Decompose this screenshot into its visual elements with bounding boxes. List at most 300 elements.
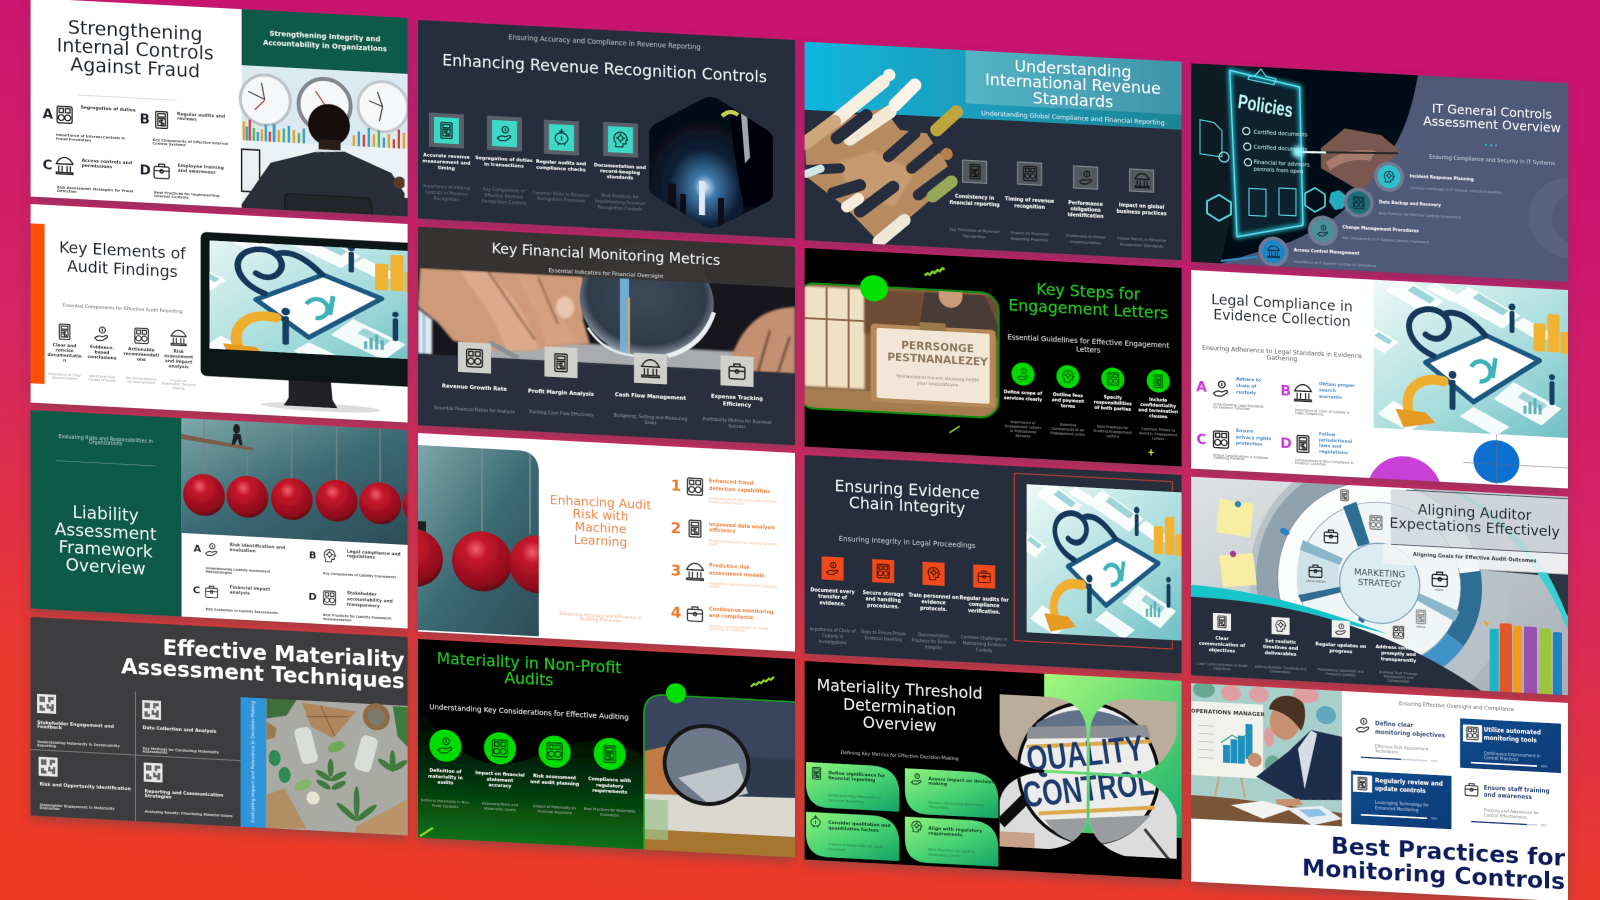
numbered list: detection capabilities bbox=[709, 486, 770, 495]
green wave bbox=[418, 707, 658, 850]
subtitle: Defining Key Metrics for Effective Decision-Making bbox=[841, 750, 959, 762]
items A-D: jurisdictional bbox=[1318, 437, 1353, 444]
labels: promptly and bbox=[1381, 650, 1416, 658]
labels bbox=[37, 719, 223, 803]
slide: Key Financial Monitoring Metrics bbox=[418, 227, 795, 446]
descriptions: Analyzing Results: Prioritizing Material Issues bbox=[145, 810, 233, 818]
card: staff training bbox=[1465, 783, 1550, 828]
numbered list: Learning Techniques bbox=[709, 500, 744, 506]
list items: Best Practices for Effective Controls Assessment bbox=[1379, 211, 1462, 220]
green cards: Financial Reporting bbox=[828, 798, 864, 804]
labels bbox=[810, 587, 1009, 616]
descriptions: Importance of bbox=[1010, 420, 1036, 425]
icons bbox=[1213, 613, 1408, 641]
labels: Impact on global bbox=[1119, 202, 1165, 210]
items A-D: reviews bbox=[177, 115, 197, 122]
descriptions: Key Principles of Revenue bbox=[950, 226, 1000, 234]
numbered list: assessment models bbox=[709, 570, 764, 579]
items A-D: Access controls and bbox=[82, 157, 132, 166]
descriptions: Custody in bbox=[822, 632, 844, 638]
card: automated tools: 80% bbox=[1541, 764, 1548, 768]
descriptions: Profit Contexts bbox=[432, 804, 459, 809]
labels: Train personnel on bbox=[908, 592, 959, 601]
descriptions: Essential Financial Ratios for Analysis bbox=[434, 405, 515, 415]
descriptions: Common Pitfalls to bbox=[1141, 427, 1175, 433]
descriptions: Defining Materiality in Non- bbox=[421, 798, 471, 805]
green cards: financial reporting bbox=[828, 775, 875, 783]
items A-D: Gathering Practices bbox=[1213, 456, 1245, 461]
items A-D: Internal Controls bbox=[154, 194, 188, 200]
numbered list bbox=[671, 476, 778, 635]
heading: Overview bbox=[863, 712, 937, 735]
items A-D: Regular audits and bbox=[177, 111, 225, 119]
labels: Reporting and Communication bbox=[145, 788, 223, 798]
title panel: Standards bbox=[1033, 88, 1113, 111]
heading: Risk with bbox=[573, 505, 628, 523]
subtitle: Ensuring Adherence to Legal Standards in Evidence bbox=[1202, 344, 1362, 360]
items A-D: Best Practices for Liability Framework bbox=[323, 613, 392, 621]
descriptions bbox=[37, 740, 233, 820]
items A-D: Detection bbox=[57, 189, 77, 194]
items A-D: Follow bbox=[1319, 431, 1335, 438]
descriptions: Evaluation bbox=[600, 813, 619, 818]
descriptions: Impact on bbox=[170, 378, 187, 383]
labels: Cash Flow Management bbox=[615, 392, 686, 402]
items A-D: Importance of Internal Controls in bbox=[56, 133, 126, 141]
subtitle: Ensuring Accuracy and Compliance in Revenue Reporting bbox=[509, 33, 701, 51]
dark corner and teal swoosh bbox=[1453, 492, 1568, 631]
descriptions: Integrity bbox=[925, 644, 943, 650]
heading: Evidence Collection bbox=[1213, 307, 1351, 330]
numbered list: Audits bbox=[709, 584, 720, 589]
list items: Access Control Management bbox=[1294, 247, 1359, 256]
numbered list: Continuous monitoring bbox=[709, 606, 774, 616]
squiggles bbox=[420, 658, 774, 855]
labels: evidence bbox=[921, 599, 946, 606]
items A-D: A bbox=[43, 106, 54, 123]
labels: terms bbox=[1061, 402, 1075, 409]
neon policies photo: pennals from open bbox=[1254, 167, 1303, 175]
labels: of both parties bbox=[1094, 404, 1132, 412]
descriptions: Assessing Risks and bbox=[482, 801, 518, 807]
neon policies photo: Certified documents bbox=[1254, 130, 1308, 138]
descriptions: Profitability Metrics for Business bbox=[703, 416, 772, 425]
slide: Ensuring Evidence Chain Integrity bbox=[805, 455, 1182, 674]
descriptions: Reporting Practices bbox=[1011, 235, 1048, 242]
labels: Efficiency bbox=[723, 401, 752, 409]
labels: materiality in bbox=[428, 773, 463, 781]
slide: Aligning Auditor Expectations Effectively bbox=[1191, 443, 1568, 723]
items A-D: Consequences of Non-Compliance in bbox=[1295, 458, 1353, 465]
items A-D: Employee training bbox=[178, 162, 224, 171]
blue vertical strip bbox=[241, 697, 266, 828]
numbered list: 3 bbox=[671, 561, 681, 580]
step labels: Documentation and bbox=[594, 162, 646, 171]
items A-D: transparency bbox=[347, 601, 380, 609]
subtitle: Ensuring Integrity in Legal Proceedings bbox=[839, 535, 976, 550]
card: review controls: Regularly review and bbox=[1375, 778, 1443, 788]
card: automated tools: Continuous Improvement in bbox=[1484, 750, 1541, 758]
step descriptions: Recognition bbox=[434, 195, 459, 203]
card: review controls: update controls bbox=[1375, 786, 1426, 795]
labels: Define scope of bbox=[1004, 389, 1042, 397]
green circle icons bbox=[1012, 362, 1170, 394]
neon policies photo: Financial for advisors bbox=[1254, 160, 1310, 169]
icons bbox=[963, 159, 1154, 192]
items A-D: Stakeholder bbox=[347, 590, 378, 597]
title boxes: Aligning Goals for Effective Audit Outcomes bbox=[1413, 552, 1536, 565]
labels: concise bbox=[55, 347, 74, 354]
slide: Liability Assessment Framework Overview bbox=[31, 410, 445, 630]
items A-D: Methodologies bbox=[206, 570, 232, 575]
card: automated tools: Control Practices bbox=[1484, 755, 1518, 761]
green circle icons bbox=[429, 728, 626, 772]
card: define objectives: Techniques bbox=[1374, 748, 1398, 754]
list items: Data Backup and Recovery bbox=[1379, 199, 1441, 208]
labels bbox=[428, 767, 631, 795]
card: automated tools: monitoring tools bbox=[1484, 736, 1537, 745]
header band bbox=[242, 9, 408, 74]
labels: and payment bbox=[1052, 397, 1084, 404]
labels: and termination bbox=[1138, 407, 1178, 415]
labels: progress bbox=[1329, 648, 1352, 655]
labels: transfer of bbox=[818, 593, 848, 601]
subtitle: Ensuring Compliance and Security in IT Systems bbox=[1429, 154, 1555, 167]
list items: Change Management Procedures bbox=[1342, 224, 1419, 233]
green cards: Impact of Materiality on Audit bbox=[828, 842, 884, 849]
green cards: Understanding Materiality in bbox=[828, 793, 881, 800]
labels: obligations bbox=[1071, 206, 1101, 214]
descriptions: Engagement Letter bbox=[1051, 431, 1086, 437]
items A-D: Ensure bbox=[1236, 427, 1253, 434]
labels: Address concerns bbox=[1376, 644, 1422, 652]
items A-D: Implementation bbox=[323, 617, 352, 622]
labels: procedures. bbox=[867, 602, 900, 610]
neon policies photo: Certified documents bbox=[1254, 145, 1308, 153]
card: staff training: Ensure staff training bbox=[1484, 785, 1550, 795]
labels bbox=[949, 194, 1167, 218]
items A-D: Understanding Liability Assessment bbox=[206, 566, 271, 574]
step labels: Regular audits and bbox=[536, 158, 586, 167]
labels: compliance bbox=[969, 601, 1000, 609]
numbered list: Integrating Risk Assessment in Financial bbox=[709, 581, 777, 589]
red frame with illustration bbox=[1011, 473, 1182, 650]
items A-D: analysis bbox=[230, 589, 250, 596]
step descriptions: Implementing Revenue bbox=[595, 198, 645, 207]
items A-D: Evidence Collection bbox=[1295, 461, 1326, 467]
subtitle: Enhancing Accuracy and Efficiency in bbox=[559, 610, 642, 621]
slide: Enhancing Audit Risk with Machine Learning bbox=[385, 431, 795, 653]
items A-D: Control Systems bbox=[153, 141, 186, 147]
labels: Actionable bbox=[128, 346, 154, 353]
neon policies photo bbox=[1191, 63, 1418, 274]
slide: Strengthening Internal Controls Against Fraud bbox=[31, 0, 409, 217]
labels: based bbox=[95, 349, 109, 356]
teal icons bbox=[429, 113, 638, 159]
labels: financial reporting bbox=[950, 199, 1000, 208]
QR icons bbox=[37, 694, 163, 782]
items A-D: chain of bbox=[1236, 382, 1256, 389]
neon policies photo: Policies bbox=[1237, 91, 1294, 122]
step labels: standards bbox=[607, 174, 633, 181]
step labels: record-keeping bbox=[600, 168, 640, 176]
photo: parcels and plants bbox=[266, 698, 409, 836]
items A-D: for Evidence Collection bbox=[1213, 405, 1250, 411]
title boxes bbox=[1383, 489, 1568, 574]
labels: Revenue Growth Rate bbox=[442, 384, 507, 393]
descriptions: Drafting Engagement bbox=[1093, 429, 1133, 435]
subtitle: Essential Guidelines for Effective Engagement bbox=[1007, 333, 1169, 350]
green panel: Overview bbox=[66, 555, 146, 579]
items A-D: Segregation of duties bbox=[81, 104, 136, 113]
green panel: Organizations bbox=[89, 439, 123, 447]
title panel bbox=[966, 50, 1182, 115]
descriptions: Recommendations bbox=[126, 376, 157, 382]
books bbox=[1483, 620, 1562, 702]
marketing wheel: MARKETING bbox=[1354, 568, 1405, 581]
heading: Legal Compliance in bbox=[1211, 292, 1353, 316]
items A-D: Key Components of Liability Frameworks bbox=[323, 571, 397, 579]
labels: Regular updates on bbox=[1315, 641, 1366, 649]
marketing wheel: SOCIA MEDIA bbox=[1306, 579, 1327, 584]
dark lower wave bbox=[1191, 585, 1481, 691]
step descriptions: Common Risks in Revenue bbox=[532, 190, 590, 199]
descriptions: Transparency and bbox=[1382, 675, 1414, 680]
labels: Risk and Opportunity Identification bbox=[40, 781, 131, 792]
green cards: Materiality Levels bbox=[928, 853, 961, 858]
labels: Data Collection and Analysis bbox=[143, 725, 217, 735]
labels: recommendati bbox=[123, 350, 160, 358]
labels: analysis bbox=[169, 363, 189, 370]
heading: Chain Integrity bbox=[849, 492, 965, 518]
heading: Best Practices for bbox=[1331, 831, 1565, 872]
slide: Materiality in Non-Profit Audits bbox=[418, 639, 795, 859]
descriptions: Causes of Issues bbox=[88, 378, 116, 383]
descriptions: Making bbox=[173, 386, 185, 391]
labels: timelines and bbox=[1263, 644, 1298, 652]
descriptions: Documentation bbox=[52, 376, 77, 381]
photo: red pendulum balls bbox=[182, 418, 445, 547]
slide: IT General Controls Assessment Overview bbox=[1191, 63, 1568, 282]
card: define objectives: monitoring objectives bbox=[1375, 730, 1446, 739]
card: review controls bbox=[1351, 770, 1452, 829]
step labels bbox=[422, 152, 646, 182]
labels: Risk assessment bbox=[533, 773, 577, 781]
photo: operations manager: OPERATIONS MANAGER bbox=[1191, 709, 1265, 719]
labels: Clear bbox=[1215, 635, 1229, 642]
items A-D: laws and bbox=[1319, 442, 1341, 449]
items A-D: Legal Compliance bbox=[1295, 411, 1323, 417]
step labels: compliance checks bbox=[536, 164, 586, 173]
labels: Definition of bbox=[429, 767, 462, 775]
items A-D: regulations bbox=[1319, 448, 1348, 456]
heading: Engagement Letters bbox=[1008, 295, 1168, 322]
items A-D: B bbox=[140, 111, 150, 128]
descriptions: in Professional bbox=[1010, 429, 1036, 434]
green cards: quantitative factors bbox=[828, 825, 879, 833]
descriptions: Stakeholder Engagement in Materiality bbox=[40, 803, 115, 811]
descriptions: Future Trends in Revenue bbox=[1117, 235, 1167, 242]
numbered list: Predictive risk bbox=[709, 563, 750, 571]
green cards: Align with regulatory bbox=[928, 825, 982, 834]
descriptions: Engagement Letters bbox=[1005, 424, 1041, 430]
descriptions: Essential bbox=[1060, 423, 1076, 427]
descriptions: Stakeholder Decision bbox=[161, 382, 196, 387]
descriptions: Frequent Updates bbox=[1326, 672, 1356, 677]
descriptions: Practices for Evidence bbox=[911, 637, 956, 644]
green cards: Thresholds bbox=[927, 805, 948, 810]
items A-D: custody bbox=[1236, 389, 1256, 396]
descriptions: Clear Communication of Audit bbox=[1197, 662, 1248, 668]
descriptions: Success bbox=[728, 423, 746, 430]
labels: services clearly bbox=[1004, 394, 1042, 402]
items A-D: A bbox=[1196, 379, 1207, 396]
descriptions: Collaboration bbox=[1387, 679, 1410, 684]
green cards: Best Practices for Setting bbox=[928, 848, 975, 854]
descriptions: Setting Realistic Timelines and bbox=[1255, 664, 1307, 671]
descriptions: Best Practices for bbox=[1097, 425, 1129, 430]
green panel: Framework bbox=[59, 537, 153, 562]
items A-D: accountability and bbox=[347, 596, 393, 604]
header band: Accountability in Organizations bbox=[263, 39, 387, 53]
heading: Effective Materiality bbox=[163, 635, 405, 673]
descriptions: for Improvement bbox=[127, 380, 156, 385]
descriptions: Custody bbox=[976, 647, 993, 652]
items A-D bbox=[1196, 374, 1355, 468]
descriptions: Evaluation bbox=[40, 806, 60, 811]
labels: protocols. bbox=[920, 605, 947, 613]
descriptions: Importance of Clear bbox=[48, 372, 82, 378]
heading: Against Fraud bbox=[70, 54, 200, 82]
heading: Internal Controls bbox=[57, 34, 214, 65]
card: staff training: 85% bbox=[1541, 823, 1548, 827]
labels: transparently bbox=[1381, 656, 1416, 664]
numbered list: Enhanced fraud bbox=[709, 478, 754, 487]
descriptions: Impact of Materiality on bbox=[533, 804, 576, 810]
items A-D bbox=[193, 540, 401, 625]
step labels: Accurate revenue bbox=[423, 152, 470, 160]
labels: n bbox=[63, 358, 66, 363]
descriptions: Services bbox=[1015, 434, 1031, 438]
items A-D: Adhere to bbox=[1236, 376, 1261, 383]
photo: operations manager bbox=[1191, 681, 1342, 827]
numbered list: 1 bbox=[671, 476, 681, 495]
items A-D: B bbox=[1280, 383, 1291, 400]
icons bbox=[59, 324, 186, 346]
card: review controls: Enhanced Monitoring bbox=[1375, 805, 1419, 812]
labels: identification bbox=[1068, 212, 1104, 220]
subtitle bbox=[1430, 144, 1555, 166]
step labels: timing bbox=[438, 165, 455, 171]
photo: sign board: PESTNANALEZEY bbox=[887, 351, 988, 369]
descriptions: Building Trust Through bbox=[1379, 670, 1418, 676]
items A-D: Obtain proper bbox=[1319, 381, 1355, 389]
step labels: measurement and bbox=[422, 158, 470, 166]
heading: Enhancing Revenue Recognition Controls bbox=[442, 50, 767, 86]
descriptions: Materiality Levels bbox=[484, 807, 516, 812]
items A-D: evaluation bbox=[230, 547, 256, 554]
heading: Machine bbox=[575, 518, 626, 536]
labels: evidence. bbox=[820, 600, 846, 607]
descriptions: Recognition bbox=[963, 233, 987, 239]
photo: magnifier on papers bbox=[644, 694, 795, 859]
descriptions: Common Challenges in bbox=[961, 634, 1008, 641]
labels: Document every bbox=[810, 587, 856, 595]
descriptions: Tracking Cash Flow Effectively bbox=[528, 409, 594, 419]
descriptions: Avoid in Engagement bbox=[1139, 431, 1178, 437]
numbered list: Predictive Analytics for Identifying Audit bbox=[709, 539, 778, 546]
labels: Consistency in bbox=[955, 193, 995, 201]
items A-D: search bbox=[1319, 387, 1336, 394]
heading: IT General Controls bbox=[1432, 100, 1552, 121]
sticky notes bbox=[1216, 498, 1291, 591]
heading: Ensuring Evidence bbox=[835, 476, 980, 502]
card: staff training: Training and Awareness for bbox=[1483, 807, 1539, 815]
list items: Common Challenges in IT General Controls Evaluation bbox=[1410, 186, 1502, 195]
card: staff training: and awareness bbox=[1484, 793, 1532, 801]
numbered list: Improved data analysis bbox=[709, 522, 775, 532]
descriptions: Documentation bbox=[918, 631, 949, 638]
items A-D: Financial impact bbox=[230, 584, 270, 592]
icons bbox=[458, 341, 754, 389]
labels: Set realistic bbox=[1265, 638, 1296, 645]
green cards: Consider qualitative and bbox=[828, 819, 891, 829]
green cards: requirements bbox=[928, 830, 963, 838]
slide: Key Steps for Engagement Letters bbox=[797, 248, 1182, 466]
descriptions bbox=[1197, 661, 1418, 684]
marketing wheel: EMAIL bbox=[1435, 588, 1445, 592]
green panel: Liability bbox=[72, 503, 139, 526]
descriptions bbox=[950, 226, 1167, 248]
green cards: Assess impact on decision- bbox=[928, 776, 997, 785]
descriptions: Impact on Financial bbox=[1011, 229, 1048, 236]
items A-D: permissions bbox=[82, 162, 112, 170]
heading: Learning bbox=[574, 531, 627, 549]
orange bar bbox=[31, 223, 45, 384]
heading: Key Financial Monitoring Metrics bbox=[492, 241, 720, 269]
descriptions bbox=[434, 401, 772, 432]
photo strips: hand bbox=[805, 71, 957, 247]
squiggle bbox=[925, 267, 945, 276]
slide: Materiality Threshold Determination Overview bbox=[805, 661, 1182, 880]
card: define objectives: Effective Risk Assessment bbox=[1375, 743, 1429, 751]
labels: documentatio bbox=[47, 351, 82, 359]
labels: business practices bbox=[1117, 208, 1167, 217]
descriptions: Components of an bbox=[1051, 427, 1084, 432]
labels: statement bbox=[487, 776, 514, 784]
title boxes: Aligning Auditor bbox=[1418, 502, 1532, 524]
descriptions: Steps to Ensure Proper bbox=[860, 628, 906, 636]
step descriptions: Importance of Internal bbox=[422, 183, 470, 191]
photo: sign board: Yourwnsional micere staniong hetith bbox=[895, 373, 979, 383]
labels bbox=[47, 341, 193, 370]
numbered list: 4 bbox=[671, 603, 681, 622]
green cards: Define significance for bbox=[828, 770, 886, 779]
green cards: making bbox=[928, 780, 947, 787]
descriptions: Understanding Materiality in Sustainability bbox=[37, 740, 121, 748]
items A-D: Ethical Considerations in Evidence bbox=[1213, 453, 1268, 460]
labels: Stakeholder Engagement and bbox=[37, 719, 114, 729]
labels: Evidence- bbox=[90, 344, 114, 351]
illustration bbox=[1354, 275, 1570, 440]
card: automated tools bbox=[1460, 718, 1561, 773]
labels: objectives bbox=[1209, 647, 1235, 654]
labels: conclusions bbox=[88, 354, 117, 361]
labels: assessment bbox=[164, 353, 193, 360]
quatrefoil photo: quality control magnifier: QUALITY bbox=[1024, 727, 1146, 780]
photo: sign board: your eneusatsune bbox=[917, 380, 958, 388]
card: automated tools: Utilize automated bbox=[1484, 728, 1541, 737]
